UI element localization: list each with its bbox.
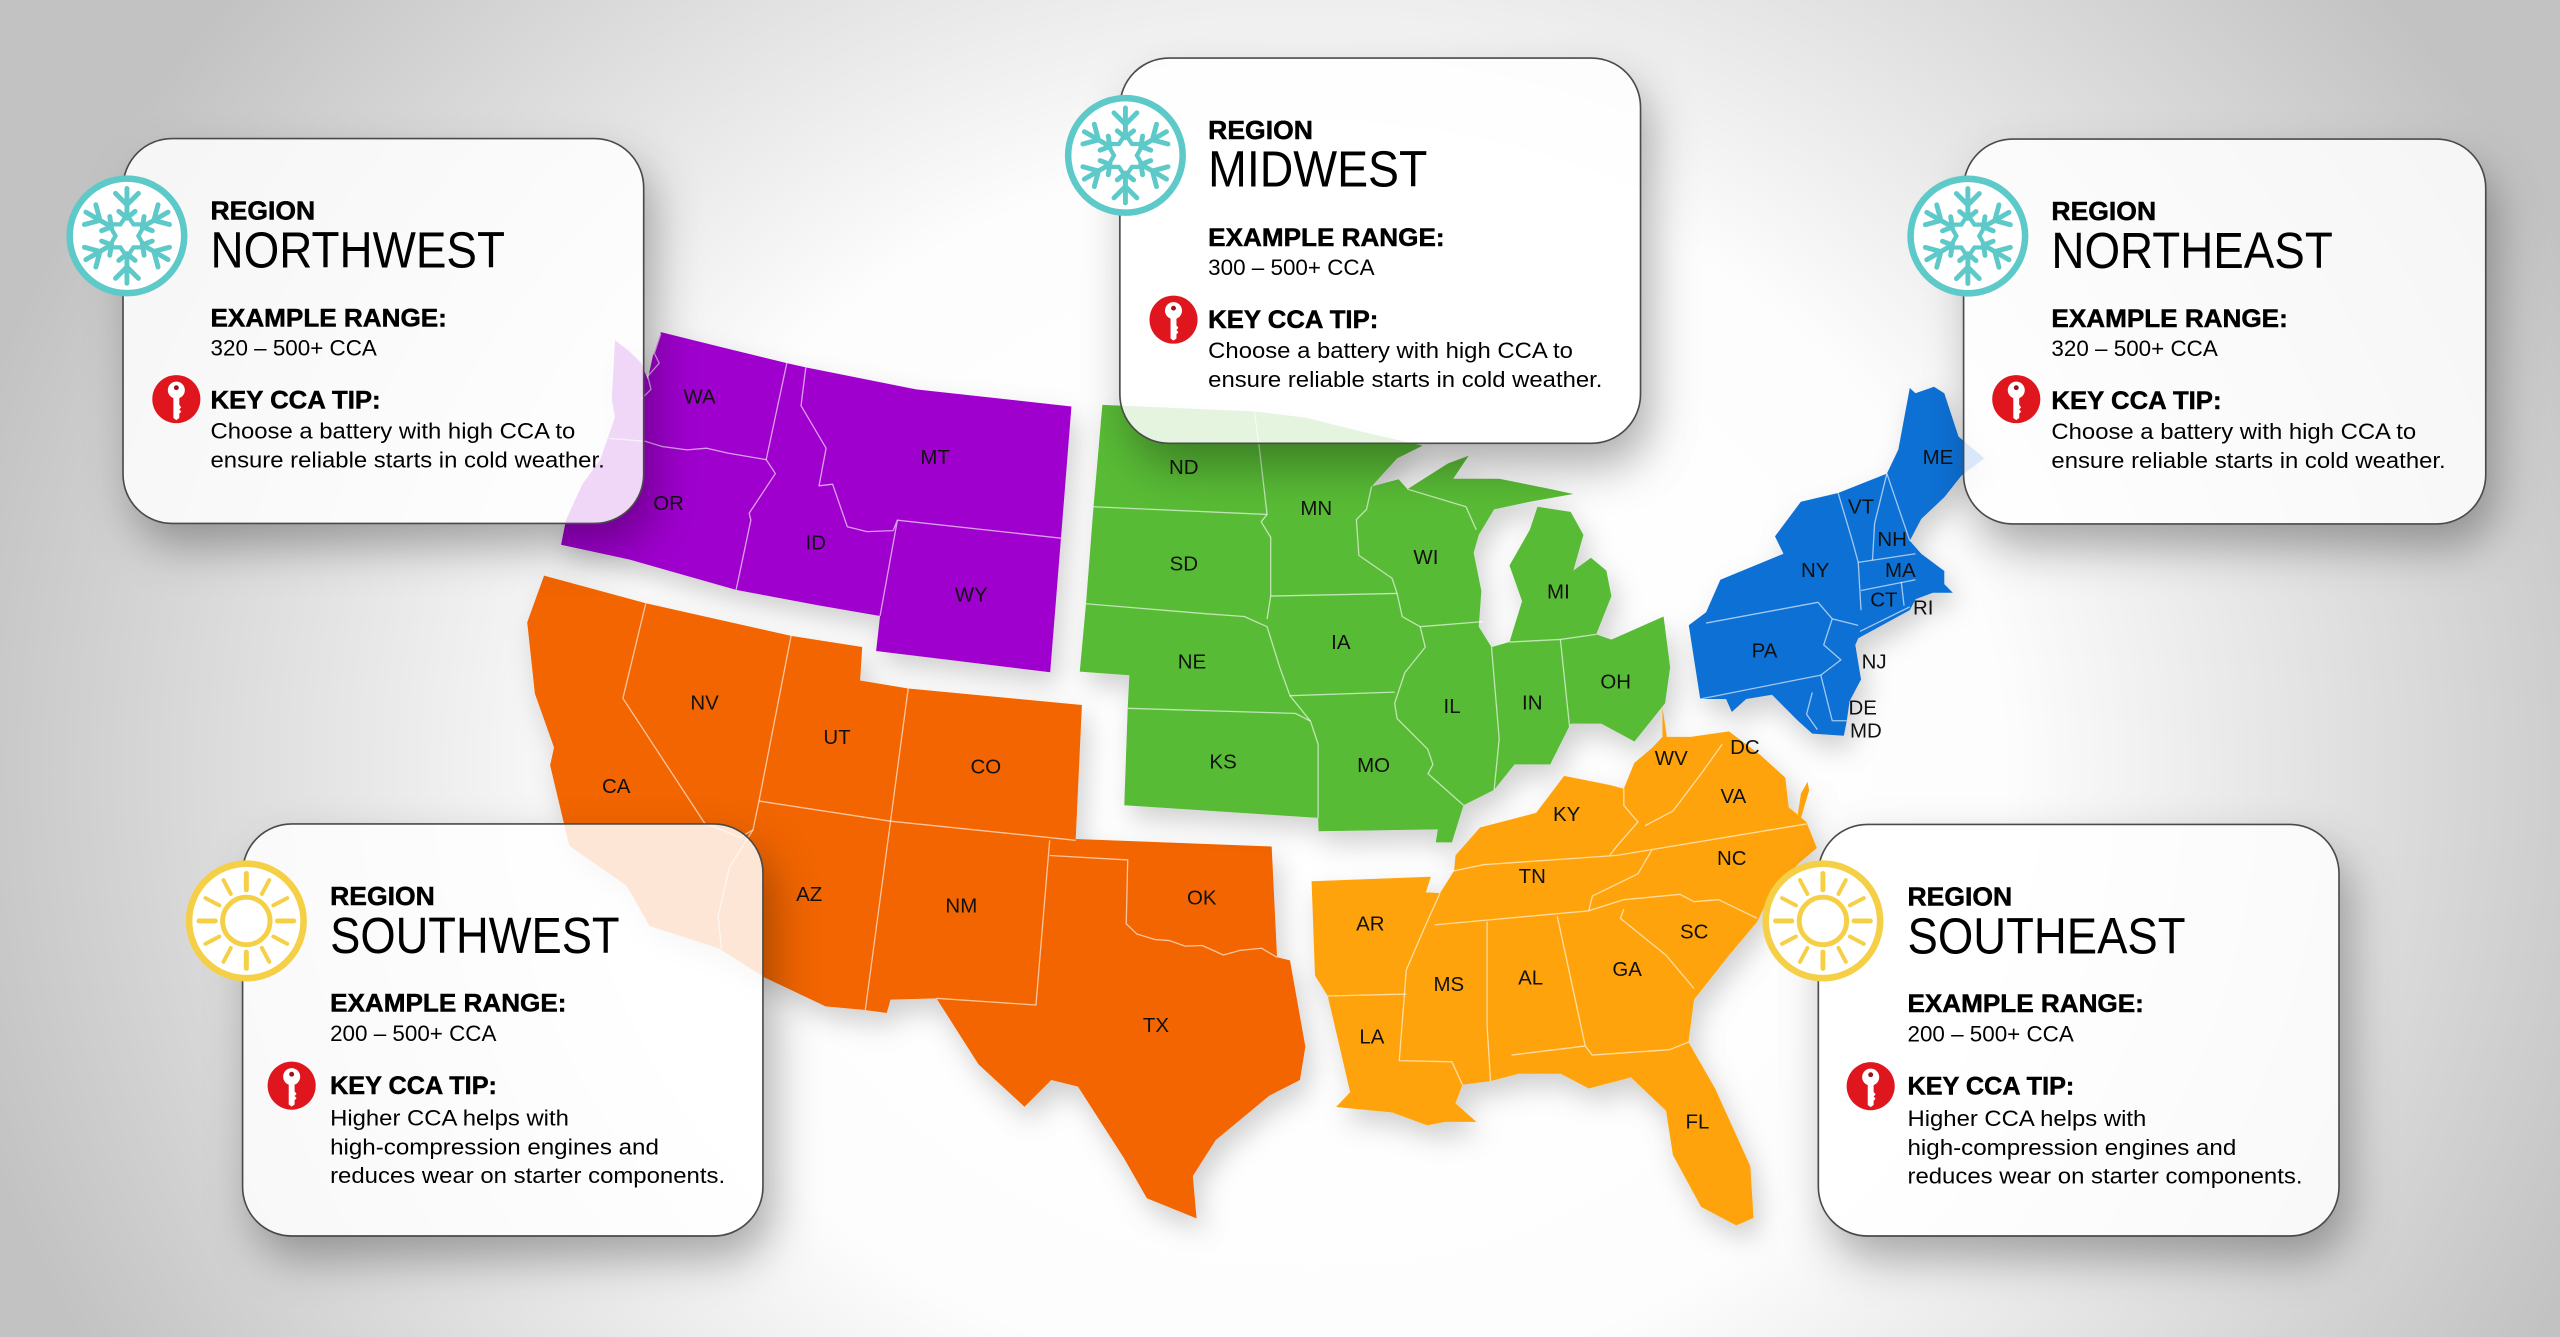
state labels: OR [653,492,684,515]
card shadow [123,139,644,523]
key cca tip: KEY CCA TIP: [1208,306,1378,334]
region heading: REGION [1907,881,2012,911]
key cca tip [1208,306,1602,392]
icon: sun [1766,864,1880,978]
region heading: REGION [211,196,315,226]
icon: snowflake [70,179,184,293]
card background [1818,824,2339,1236]
region map: northwest [561,332,1071,672]
state labels: MD [1850,719,1882,742]
panel: southwest [189,824,763,1236]
state labels: IA [1331,631,1351,654]
card background [243,824,763,1236]
panel: southeast [1766,824,2339,1236]
state labels: DE [1848,697,1877,720]
key cca tip [330,1072,725,1188]
state labels: NM [945,894,977,917]
region heading: MIDWEST [1208,140,1427,197]
key cca tip: high-compression engines and [330,1134,659,1159]
state labels: RI [1913,597,1933,620]
state labels: FL [1686,1110,1709,1133]
map of US regions [527,332,1984,1225]
key cca tip: Choose a battery with high CCA to [211,419,575,444]
region heading: NORTHEAST [2051,222,2333,279]
state labels: ND [1169,456,1199,479]
state labels: NY [1801,559,1830,582]
key cca tip: Choose a battery with high CCA to [1208,338,1573,363]
state labels: NH [1877,528,1907,551]
state labels: AR [1356,912,1384,935]
card shadow [1964,139,2486,524]
card shadow [243,824,763,1236]
region heading [1907,881,2186,964]
region heading: REGION [330,881,435,911]
region heading: SOUTHWEST [330,907,620,964]
region map: northeast [1689,387,1984,736]
example range: EXAMPLE RANGE: [1907,990,2144,1018]
icon: key [1992,375,2040,423]
state labels: SD [1170,553,1198,576]
example range: EXAMPLE RANGE: [1208,224,1445,252]
example range: 200 – 500+ CCA [330,1021,497,1046]
state labels: KY [1553,803,1581,826]
example range: EXAMPLE RANGE: [330,990,566,1018]
region heading [211,196,505,278]
region heading [330,881,620,964]
card background [1964,139,2486,524]
panel: midwest [1068,58,1641,443]
key cca tip: KEY CCA TIP: [330,1072,497,1100]
state labels: WV [1655,747,1688,770]
state labels: MN [1300,497,1332,520]
icon: key [152,375,200,423]
region map: midwest [1080,405,1670,842]
example range [211,304,447,360]
example range [2051,305,2288,361]
example range [1208,224,1445,280]
card shadow [1120,58,1641,443]
state labels: VA [1721,785,1747,808]
key cca tip: reduces wear on starter components. [330,1163,725,1188]
state labels: VT [1848,495,1875,518]
state labels: NV [690,692,719,715]
state labels: NE [1178,651,1206,674]
state labels: MS [1433,973,1464,996]
example range [1907,990,2144,1046]
key cca tip: ensure reliable starts in cold weather. [1208,367,1602,392]
example range: EXAMPLE RANGE: [2051,305,2288,333]
state labels [602,386,1953,1133]
key cca tip: KEY CCA TIP: [1907,1072,2074,1100]
state labels: DC [1730,736,1760,759]
icon: key [1847,1062,1895,1110]
state labels: IL [1444,695,1461,718]
state labels: LA [1359,1025,1385,1048]
example range: 200 – 500+ CCA [1907,1021,2074,1046]
state labels: WY [955,584,988,607]
example range: 300 – 500+ CCA [1208,255,1375,280]
key cca tip: high-compression engines and [1907,1135,2236,1160]
state labels: TN [1519,865,1546,888]
example range [330,990,566,1046]
key cca tip: KEY CCA TIP: [2051,387,2222,415]
region heading: NORTHWEST [211,221,505,278]
key cca tip [1907,1072,2303,1189]
icon: snowflake [1911,179,2025,293]
card background [123,139,644,523]
state labels: MO [1357,754,1390,777]
example range: 320 – 500+ CCA [211,335,377,360]
state labels: SC [1680,921,1708,944]
region heading: REGION [1208,115,1313,145]
state labels: TX [1143,1014,1169,1037]
state labels: PA [1752,639,1778,662]
region heading [1208,115,1427,197]
region heading [2051,196,2333,279]
key cca tip: KEY CCA TIP: [211,386,381,414]
panel: northeast [1911,139,2486,524]
key cca tip: Higher CCA helps with [1907,1106,2146,1131]
state labels: MT [920,446,950,469]
state labels: WI [1413,546,1438,569]
state labels: CA [602,775,631,798]
state labels: CT [1870,589,1898,612]
key cca tip [2051,387,2446,473]
state labels: MA [1885,559,1916,582]
state labels: CO [971,755,1001,778]
state labels: OH [1600,670,1631,693]
icon: key [268,1062,316,1110]
state labels: ID [806,531,826,554]
icon: sun [189,864,304,978]
state labels: KS [1209,750,1237,773]
region map: southwest [527,576,1305,1218]
state labels: OK [1187,886,1217,909]
icon: key [1149,296,1198,344]
panel: northwest [70,139,644,523]
state labels: WA [684,386,716,409]
region map: southeast [1312,707,1817,1225]
card background [1120,58,1641,443]
state labels: AZ [796,883,822,906]
state labels: ME [1923,446,1953,469]
region heading: SOUTHEAST [1907,907,2186,964]
icon: snowflake [1068,98,1183,213]
state labels: UT [823,726,851,749]
state labels: IN [1522,692,1542,715]
key cca tip: Higher CCA helps with [330,1106,569,1131]
key cca tip: ensure reliable starts in cold weather. [2051,448,2446,473]
key cca tip: Choose a battery with high CCA to [2051,419,2416,444]
key cca tip [211,386,605,472]
state labels: MI [1547,580,1570,603]
state labels: AL [1518,966,1543,989]
state labels: GA [1612,958,1642,981]
example range: 320 – 500+ CCA [2051,336,2218,361]
state labels: NC [1717,847,1747,870]
key cca tip: ensure reliable starts in cold weather. [211,447,605,472]
region heading: REGION [2051,196,2156,226]
card shadow [1818,824,2339,1236]
example range: EXAMPLE RANGE: [211,304,447,332]
key cca tip: reduces wear on starter components. [1907,1164,2303,1189]
state labels: NJ [1862,651,1887,674]
